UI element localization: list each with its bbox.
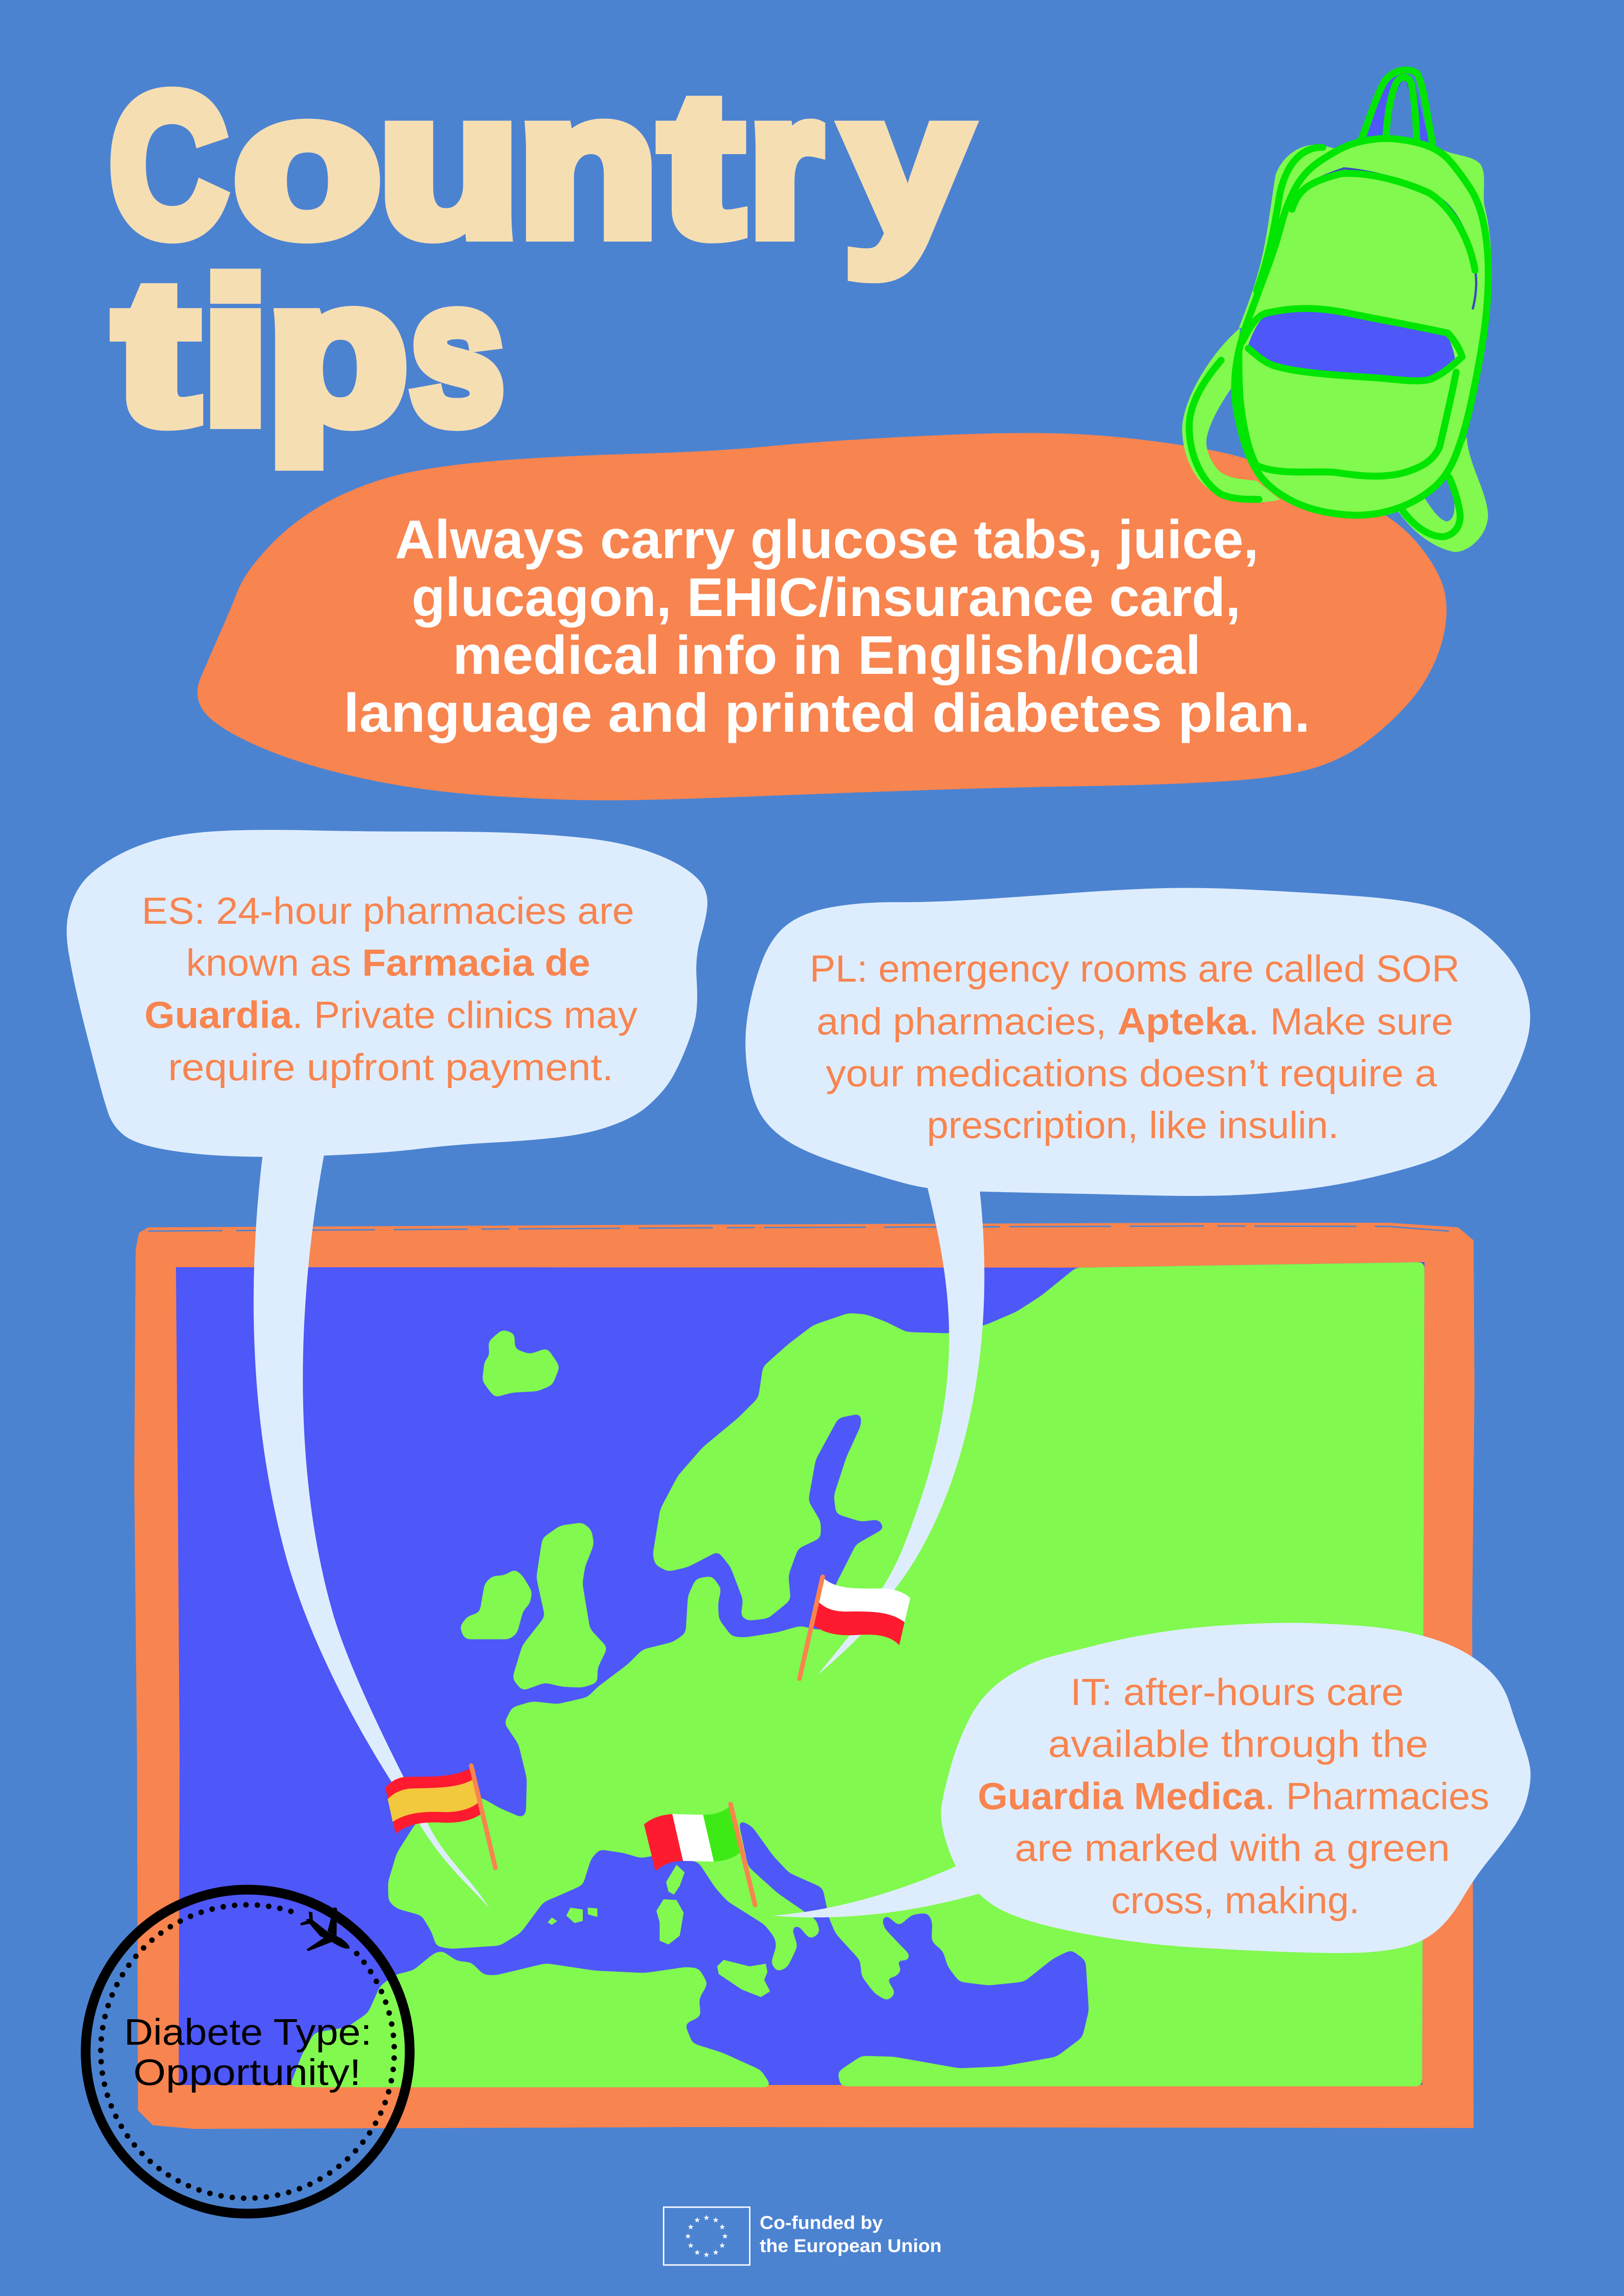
islands: Iceland, Ireland, Britain — [460, 1329, 607, 1691]
callout: Spain speech bubble: Guardia. Private clinics may — [144, 994, 637, 1036]
stamp: Diabete Type Opportunity: Opportunity! — [133, 2052, 361, 2093]
title: u — [379, 52, 519, 277]
callout: Poland speech bubble: and pharmacies, Apteka. Make sure — [817, 1001, 1453, 1043]
title: y — [844, 52, 970, 278]
title: p — [268, 240, 407, 466]
panel: map frame — [134, 1223, 1474, 2129]
callout: Italy speech bubble: Guardia Medica. Pharmacies — [978, 1775, 1489, 1817]
callout: Spain speech bubble: ES: 24-hour pharmacies are — [142, 890, 634, 932]
callout: Italy speech bubble: IT: after-hours care — [1070, 1671, 1404, 1713]
panel: orange reminder blob — [197, 433, 1447, 800]
callout: Italy speech bubble — [772, 1623, 1530, 1953]
title: i — [202, 240, 269, 464]
icon: green backpack — [1182, 70, 1491, 552]
callout: Poland speech bubble — [745, 888, 1530, 1675]
icon: Spain flag — [385, 1766, 495, 1868]
callout: Italy speech bubble: cross, making. — [1111, 1879, 1360, 1922]
callout: Spain speech bubble: known as Farmacia de — [186, 942, 590, 984]
title: t — [116, 240, 197, 464]
callout: Poland speech bubble: PL: emergency rooms are called SOR — [810, 948, 1460, 990]
panel: orange reminder blob: language and printed diabetes plan. — [344, 683, 1310, 744]
icon: airplane — [300, 1907, 350, 1951]
callout: Poland speech bubble: your medications doesn’t require a — [826, 1052, 1437, 1095]
panel: orange reminder blob: medical info in English/local — [453, 625, 1201, 686]
title: o — [234, 52, 381, 277]
land: North Africa — [289, 1951, 772, 2087]
stamp: Diabete Type Opportunity: Diabete Type: — [124, 2011, 372, 2053]
logo: EU co-funded — [664, 2207, 942, 2265]
islands: Balearic — [548, 1908, 597, 1925]
callout: Spain speech bubble — [67, 830, 707, 1909]
title: r — [750, 52, 821, 277]
logo: EU co-funded: the European Union — [760, 2236, 942, 2256]
icon: EU flag — [664, 2207, 750, 2265]
stamp: Diabete Type Opportunity — [86, 1890, 410, 2214]
icon: Poland flag — [800, 1577, 910, 1679]
callout: Spain speech bubble: require upfront payment. — [168, 1046, 613, 1089]
callout: Italy speech bubble: available through the — [1048, 1723, 1428, 1765]
panel: orange reminder blob: Always carry glucose tabs, juice, — [395, 509, 1259, 570]
panel: orange reminder blob: glucagon, EHIC/insurance card, — [412, 567, 1241, 628]
land: Europe and Asia — [388, 1262, 1424, 2086]
callout: Italy speech bubble: are marked with a green — [1015, 1827, 1450, 1869]
title: s — [410, 240, 504, 464]
sea — [176, 1262, 1424, 2085]
callout: Poland speech bubble: prescription, like insulin. — [927, 1104, 1339, 1146]
icon: Italy flag — [644, 1804, 755, 1905]
title: n — [518, 52, 657, 277]
title: t — [662, 52, 742, 277]
title: C — [110, 52, 227, 277]
title — [110, 52, 970, 466]
map: Europe — [176, 1262, 1424, 2087]
logo: EU co-funded: Co-funded by — [760, 2213, 883, 2233]
islands: Mediterranean — [656, 1865, 770, 1997]
